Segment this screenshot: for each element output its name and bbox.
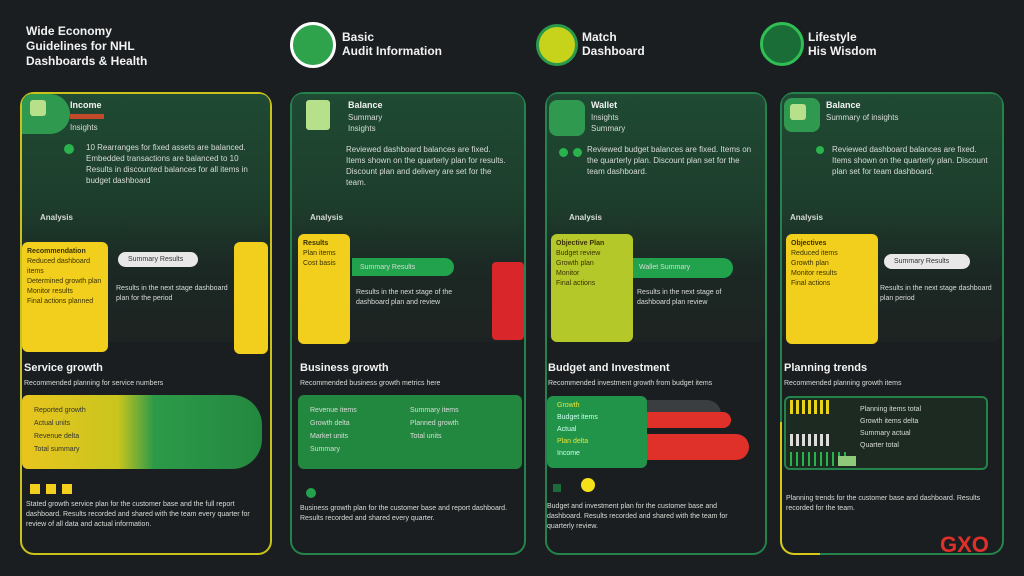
panel: column 2: Summary (348, 113, 382, 122)
header: column 3: Match (582, 30, 617, 44)
panel: column 4: Results in the next stage dashboard plan period (880, 285, 992, 302)
panel: column 4: Reduced items (791, 250, 838, 257)
panel: column 2: Business growth plan for the customer base and report dashboard. Results recorded and shared every quarter. (300, 505, 507, 522)
panel: column 2: Analysis (310, 213, 343, 222)
panel: column 4: Growth items delta (860, 418, 918, 425)
panel: column 2: Results in the next stage of the dashboard plan and review (356, 289, 452, 306)
panel: column 4 (780, 92, 1004, 555)
panel: column 3: Budget review (556, 250, 600, 257)
panel: column 3: Reviewed budget balances are fixed. Items on the quarterly plan. Discount plan set for the team dashboard. (587, 145, 751, 176)
panel: column 3: Plan delta (557, 438, 588, 445)
panel: column 4: Summary actual (860, 430, 911, 437)
panel: column 2: Recommended business growth metrics here (300, 380, 440, 387)
panel: column 1: Reported growth (34, 407, 86, 414)
panel: column 1: Results in the next stage dashboard plan for the period (116, 285, 228, 302)
panel: column 3: Income (557, 450, 580, 457)
section: column 1 lower: Service growth (24, 362, 103, 374)
panel: column 2: Cost basis (303, 260, 336, 267)
panel: column 3: Results in the next stage of dashboard plan review (637, 289, 721, 306)
panel: column 3: Growth (557, 402, 580, 409)
panel: column 3 (545, 92, 767, 555)
panel: column 1: Insights (70, 123, 98, 132)
icon: column 2 (290, 22, 336, 68)
panel: column 3: Monitor (556, 270, 579, 277)
section: column 3 lower: Budget and Investment (548, 362, 670, 374)
panel: column 4: Summary Results (894, 258, 949, 265)
panel: column 3: Actual (557, 426, 576, 433)
panel: column 2 (290, 92, 526, 555)
title: Guidelines for NHL (26, 39, 135, 53)
panel: column 3: Budget and investment plan for the customer base and dashboard. Results recorded and shared with the team for quarterly review. (547, 503, 728, 530)
panel: column 3: Budget items (557, 414, 598, 421)
panel: column 3: Recommended investment growth from budget items (548, 380, 712, 387)
panel: column 3: Wallet Summary (639, 264, 690, 271)
panel: column 1: Final actions planned (27, 298, 93, 305)
panel: column 1: Recommended planning for service numbers (24, 380, 163, 387)
panel: column 3: Growth plan (556, 260, 594, 267)
header: column 4: Lifestyle (808, 30, 857, 44)
panel: column 2: Revenue items (310, 407, 357, 414)
panel: column 3: Summary (591, 124, 625, 133)
panel: column 1: Actual units (34, 420, 70, 427)
panel: column 1: Stated growth service plan for the customer base and the full report dashboard. Results recorded and shared with the team every quarter for review of all data and actual information. (26, 501, 250, 528)
header: column 4 (760, 22, 877, 66)
panel: column 2: Insights (348, 124, 376, 133)
panel: column 3: Final actions (556, 280, 595, 287)
header: column 3: Dashboard (582, 44, 645, 58)
panel: column 2: Results (303, 240, 328, 247)
section: column 2 lower: Business growth (300, 362, 389, 374)
title (26, 24, 147, 68)
panel: column 2: Growth delta (310, 420, 350, 427)
panel: column 2: Reviewed dashboard balances are fixed. Items shown on the quarterly plan for results. Discount plan and delivery are set for the team. (346, 145, 506, 187)
panel: column 2: Summary (310, 446, 340, 453)
panel: column 2: Planned growth (410, 420, 459, 427)
panel: column 2: Balance (348, 100, 383, 110)
panel: column 1: Summary Results (128, 256, 183, 263)
panel: column 4: Growth plan (791, 260, 829, 267)
panel: column 4: Reviewed dashboard balances are fixed. Items shown on the quarterly plan. Discount plan set for team dashboard. (832, 145, 988, 176)
header: column 2: Basic (342, 30, 374, 44)
panel: column 4: Quarter total (860, 442, 899, 449)
panel: column 3: Insights (591, 113, 619, 122)
panel: column 4: Planning trends for the customer base and dashboard. Results recorded for the team. (786, 495, 980, 512)
panel: column 3: Objective Plan (556, 240, 604, 247)
title: Dashboards & Health (26, 54, 147, 68)
panel: column 2: Market units (310, 433, 348, 440)
section: column 4 lower: Planning trends (784, 362, 867, 374)
panel: column 1: Recommendation (27, 248, 86, 255)
panel: column 4: Summary of insights (826, 113, 898, 122)
panel: column 4: Analysis (790, 213, 823, 222)
panel: column 2: Total units (410, 433, 442, 440)
header: column 3 (536, 24, 645, 66)
panel: column 1 (20, 92, 272, 555)
header: column 2 (290, 22, 442, 68)
panel: column 1: Revenue delta (34, 433, 79, 440)
panel: column 1: Analysis (40, 213, 73, 222)
panel: column 4: Final actions (791, 280, 830, 287)
header: column 2: Audit Information (342, 44, 442, 58)
panel: column 1: Reduced dashboard items (27, 258, 90, 275)
panel: column 1: Determined growth plan (27, 278, 101, 285)
panel: column 4: Monitor results (791, 270, 837, 277)
panel: column 4: Recommended planning growth items (784, 380, 902, 387)
panel: column 1: Monitor results (27, 288, 73, 295)
panel: column 2: Summary Results (360, 264, 415, 271)
panel: column 3: Analysis (569, 213, 602, 222)
panel: column 4: Objectives (791, 240, 826, 247)
header: column 4: His Wisdom (808, 44, 877, 58)
panel: column 1: Total summary (34, 446, 80, 453)
panel: column 1: Income (70, 100, 102, 110)
title: Wide Economy (26, 24, 112, 38)
icon: column 3 (536, 24, 578, 66)
panel: column 4: Balance (826, 100, 861, 110)
icon: column 4 (760, 22, 804, 66)
panel: column 4: Planning items total (860, 406, 921, 413)
panel: column 1: 10 Rearranges for fixed assets are balanced. Embedded transactions are balanced to 10 Results in discounted balances for all items in budget dashboard (86, 143, 248, 185)
panel: column 2: Summary items (410, 407, 459, 414)
logo: GXO: GXO (940, 532, 989, 557)
panel: column 3: Wallet (591, 100, 617, 110)
panel: column 2: Plan items (303, 250, 336, 257)
